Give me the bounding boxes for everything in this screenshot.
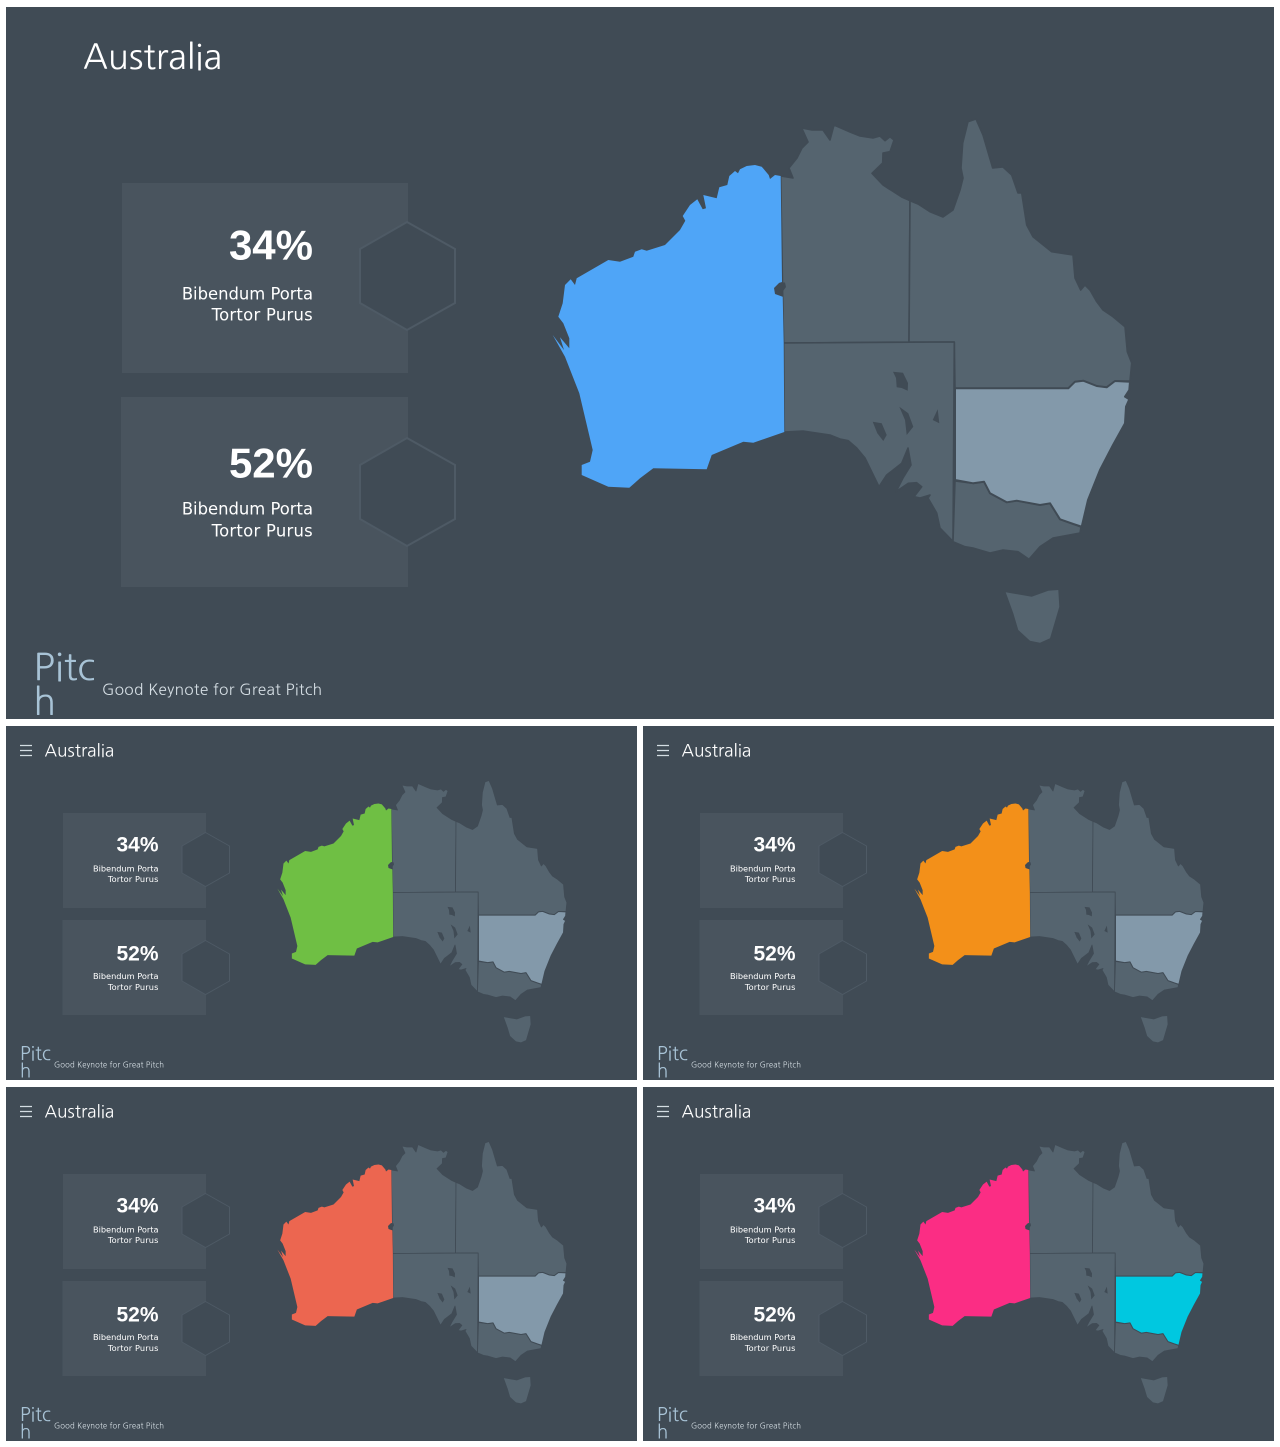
panel: 34 percent: Bibendum Porta [93,863,158,873]
slide: pink and cyan variant [643,1087,1274,1442]
panel: 34 percent: Bibendum Porta [730,863,796,873]
panel: 52 percent: Tortor Purus [211,522,313,540]
slide: orange variant [643,726,1274,1080]
panel: 52 percent: 52% [116,942,159,965]
panel: 34 percent [63,813,230,908]
menu icon [657,746,669,756]
brand footer: h [657,1422,668,1442]
map of Australia [914,780,1204,1042]
brand footer: Pitc [34,649,95,686]
panel: 52 percent: Bibendum Porta [730,1332,796,1342]
brand footer [20,1405,164,1442]
slide content [657,780,1204,1080]
title: Australia [44,742,114,760]
panel: 34 percent: 34% [116,1194,159,1217]
brand footer: h [657,1062,668,1080]
title: Australia [682,742,751,760]
panel: 34 percent: 34% [753,1194,796,1217]
menu icon [20,746,32,756]
brand footer: Pitc [20,1405,51,1424]
panel: 34 percent [63,1174,230,1269]
panel: 34 percent: 34% [753,833,796,856]
brand footer: Pitc [657,1405,688,1424]
brand footer [657,1405,801,1442]
title: Australia [83,40,222,74]
panel: 34 percent: Tortor Purus [744,874,796,884]
panel: 34 percent [700,813,866,908]
panel: 52 percent: 52% [753,1303,796,1326]
panel: 52 percent: Tortor Purus [744,982,796,992]
slide content [20,1142,567,1442]
panel: 34 percent [122,183,455,373]
slide: green variant [6,726,637,1080]
brand footer: Pitc [657,1044,688,1063]
panel: 34 percent: Bibendum Porta [93,1224,158,1234]
slide background [6,7,1274,719]
panel: 34 percent: Tortor Purus [211,306,313,324]
panel: 34 percent: Tortor Purus [107,1235,158,1245]
brand footer: h [34,684,56,721]
map of Australia [914,1142,1204,1403]
panel: 52 percent: Tortor Purus [107,1343,158,1353]
panel: 52 percent: Tortor Purus [744,1343,796,1353]
panel: 52 percent: 52% [116,1303,159,1326]
map of Australia [277,1142,567,1403]
panel: 52 percent: 52% [229,440,313,486]
brand footer: Good Keynote for Great Pitch [102,682,322,698]
panel: 52 percent [62,1281,230,1376]
panel: 34 percent: Tortor Purus [744,1235,796,1245]
brand footer: Good Keynote for Great Pitch [691,1062,801,1070]
brand footer: Pitc [20,1044,51,1063]
panel: 34 percent: 34% [229,222,313,268]
title: Australia [682,1104,751,1120]
panel: 34 percent: Bibendum Porta [182,284,313,304]
brand footer [20,1044,164,1080]
panel: 52 percent: Bibendum Porta [93,1332,158,1342]
slide: main Australia [6,7,1274,721]
slide background [643,726,1274,1080]
panel: 52 percent [700,920,866,1015]
panel: 52 percent [62,920,230,1015]
brand footer [657,1044,801,1080]
panel: 52 percent: Tortor Purus [107,982,158,992]
panel: 34 percent: 34% [116,833,159,856]
panel: 52 percent: Bibendum Porta [182,500,313,518]
menu icon [20,1106,32,1116]
title: Australia [44,1104,114,1120]
brand footer: h [20,1062,31,1080]
slide background [6,1087,637,1441]
slide background [643,1087,1274,1441]
panel: 34 percent: Tortor Purus [107,874,158,884]
slide background [6,726,637,1080]
menu icon [657,1106,669,1116]
slide content [20,780,567,1080]
panel: 52 percent: 52% [753,942,796,965]
panel: 52 percent [121,397,455,587]
slide: red variant [6,1087,637,1442]
map of Australia [553,119,1132,643]
brand footer [34,649,322,721]
brand footer: Good Keynote for Great Pitch [691,1422,801,1430]
panel: 52 percent [700,1281,866,1376]
brand footer: Good Keynote for Great Pitch [54,1062,164,1070]
panel: 34 percent: Bibendum Porta [730,1224,796,1234]
brand footer: h [20,1422,31,1442]
map of Australia [277,780,567,1042]
slide content [657,1142,1204,1442]
panel: 34 percent [700,1174,866,1269]
brand footer: Good Keynote for Great Pitch [54,1422,164,1430]
panel: 52 percent: Bibendum Porta [93,971,158,981]
panel: 52 percent: Bibendum Porta [730,971,796,981]
